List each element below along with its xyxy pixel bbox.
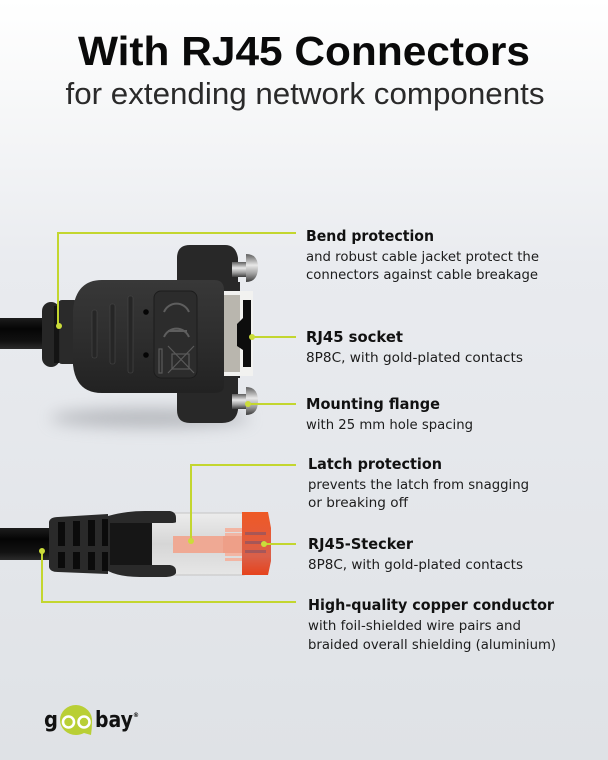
- text block: RJ45 socket: 8P8C, with gold-plated contacts: [306, 351, 523, 366]
- bend protection collar: [42, 300, 78, 367]
- callout line: mounting flange: [245, 401, 296, 407]
- callout line: RJ45 socket: [249, 334, 296, 340]
- metal shield: [150, 513, 244, 575]
- latch protection: [173, 528, 242, 561]
- text block: latch protection: Latch protection: [308, 455, 442, 473]
- housing body: [73, 280, 224, 393]
- grip ridges: [92, 296, 133, 373]
- text block: RJ45 plug: RJ45-Stecker: [308, 535, 414, 553]
- text block: mounting flange: [306, 395, 473, 433]
- text block: bend protection: and robust cable jacket protect the: [306, 250, 539, 265]
- panel: RJ45 plug connector: [0, 511, 271, 577]
- callout line: copper conductor: [39, 548, 296, 602]
- text block: copper conductor: with foil-shielded wire pairs and: [308, 619, 521, 634]
- CE marking plate: [154, 291, 197, 378]
- strain relief boot: [49, 514, 108, 574]
- logo registered mark: ®: [133, 712, 139, 719]
- callout line: latch protection: [188, 465, 296, 544]
- callout line: RJ45 plug: [261, 541, 296, 547]
- logo letters oo: [63, 716, 90, 728]
- RJ45 socket metal shell: [224, 291, 253, 376]
- screw holes: [143, 309, 149, 358]
- title: With RJ45 Connectors: [78, 28, 530, 74]
- logo letters bay: bay: [95, 708, 133, 733]
- text block: bend protection: [306, 227, 539, 283]
- top screw: [232, 254, 258, 282]
- text block: latch protection: [308, 455, 529, 511]
- cable: [0, 528, 50, 560]
- text block: copper conductor: braided overall shielding (aluminium): [308, 638, 556, 653]
- logo letter g: g: [44, 708, 58, 733]
- text block: bend protection: Bend protection: [306, 227, 434, 245]
- panel: panel-mount socket connector: [0, 245, 258, 427]
- text block: RJ45 socket: RJ45 socket: [306, 328, 403, 346]
- callout line: bend protection: [56, 233, 296, 329]
- text block: RJ45 socket: [306, 328, 523, 366]
- text block: RJ45 plug: 8P8C, with gold-plated contacts: [308, 558, 523, 573]
- text block: copper conductor: [308, 596, 556, 653]
- bottom screw: [232, 387, 258, 415]
- text block: RJ45 plug: [308, 535, 523, 573]
- subtitle: for extending network components: [66, 76, 544, 111]
- text block: copper conductor: High-quality copper conductor: [308, 596, 555, 614]
- text block: latch protection: or breaking off: [308, 496, 409, 511]
- cable: [0, 318, 44, 349]
- logo: goobay: [44, 705, 139, 735]
- text block: latch protection: prevents the latch from snagging: [308, 478, 529, 493]
- text block: bend protection: connectors against cable breakage: [306, 268, 538, 283]
- latch hood: [108, 511, 176, 577]
- red contact head: [242, 512, 271, 575]
- logo bubble: [60, 705, 92, 735]
- text block: mounting flange: Mounting flange: [306, 395, 440, 413]
- soft shadow: [50, 409, 250, 427]
- text block: mounting flange: with 25 mm hole spacing: [306, 418, 473, 433]
- mounting flange: [177, 245, 240, 423]
